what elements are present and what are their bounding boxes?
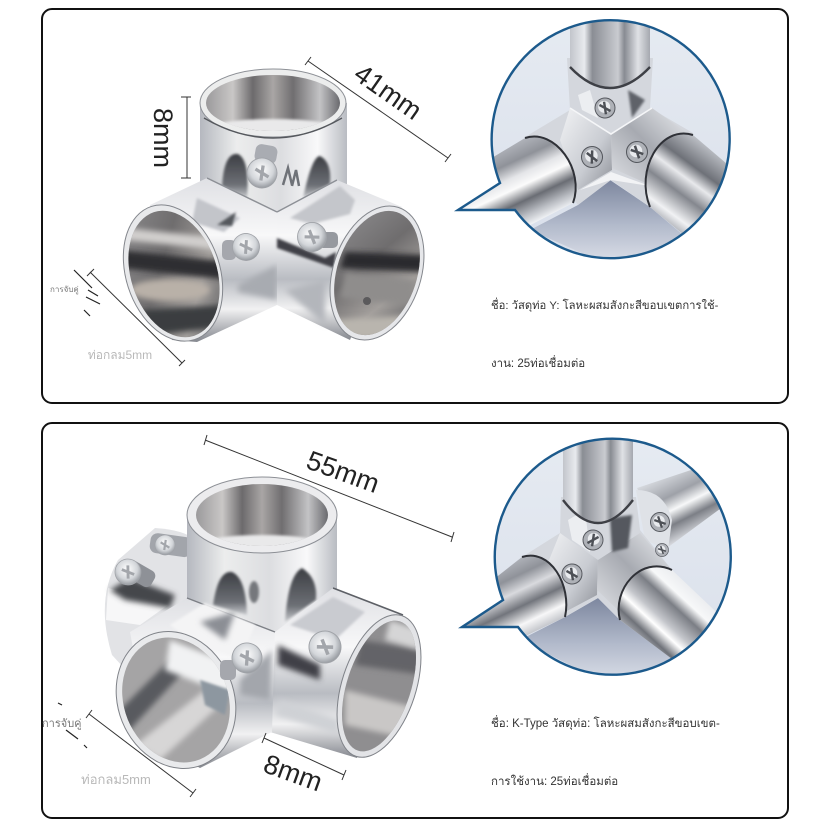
dimension: 5mm round tube <box>87 269 185 366</box>
dimension: 41mm: 41mm <box>349 58 427 126</box>
dimension: 8mm <box>260 733 346 797</box>
back socket <box>105 528 195 680</box>
panel: K-type connector <box>42 423 788 818</box>
dimension: 5mm round tube: ท่อกลม5mm <box>88 348 152 362</box>
dimension: 8mm: 8mm <box>260 749 326 797</box>
dimension: 5mm round tube: ท่อกลม5mm <box>81 772 151 787</box>
top socket <box>187 477 337 634</box>
label: matching: การจับคู่ <box>42 718 82 730</box>
specification text: งาน: 25ท่อเชื่อมต่อ <box>491 355 585 370</box>
specification text <box>491 715 720 788</box>
label: matching <box>50 270 100 316</box>
dimension: 8mm: 8mm <box>148 108 178 168</box>
screws <box>222 143 338 264</box>
specification text <box>491 297 719 370</box>
specification text: ชื่อ: K-Type วัสดุท่อ: โลหะผสมสังกะสีขอบเขต- <box>491 715 720 730</box>
specification text: การใช้งาน: 25ท่อเชื่อมต่อ <box>491 773 618 788</box>
panel: Y-type connector <box>42 9 788 403</box>
right socket <box>275 180 424 340</box>
front socket <box>116 598 276 769</box>
specification text: ชื่อ: วัสดุท่อ Y: โลหะผสมสังกะสีขอบเขตการใช้- <box>491 297 719 312</box>
dimension: 8mm <box>148 97 191 178</box>
dimension: 41mm <box>305 57 451 162</box>
dimension: 55mm <box>204 435 454 542</box>
top socket <box>200 69 347 214</box>
zoom inset: K-type assembled <box>458 438 732 676</box>
dimension: 5mm round tube <box>81 710 196 797</box>
product photo: four-way chrome connector <box>104 476 422 769</box>
label: matching: การจับคู่ <box>50 285 79 295</box>
dimension: 55mm: 55mm <box>303 445 383 499</box>
screws <box>220 628 344 680</box>
right socket <box>272 587 422 758</box>
product photo: three-way chrome connector <box>122 68 424 342</box>
zoom inset: Y-type assembled <box>454 19 731 260</box>
label: matching <box>42 703 87 748</box>
left socket <box>122 178 277 342</box>
